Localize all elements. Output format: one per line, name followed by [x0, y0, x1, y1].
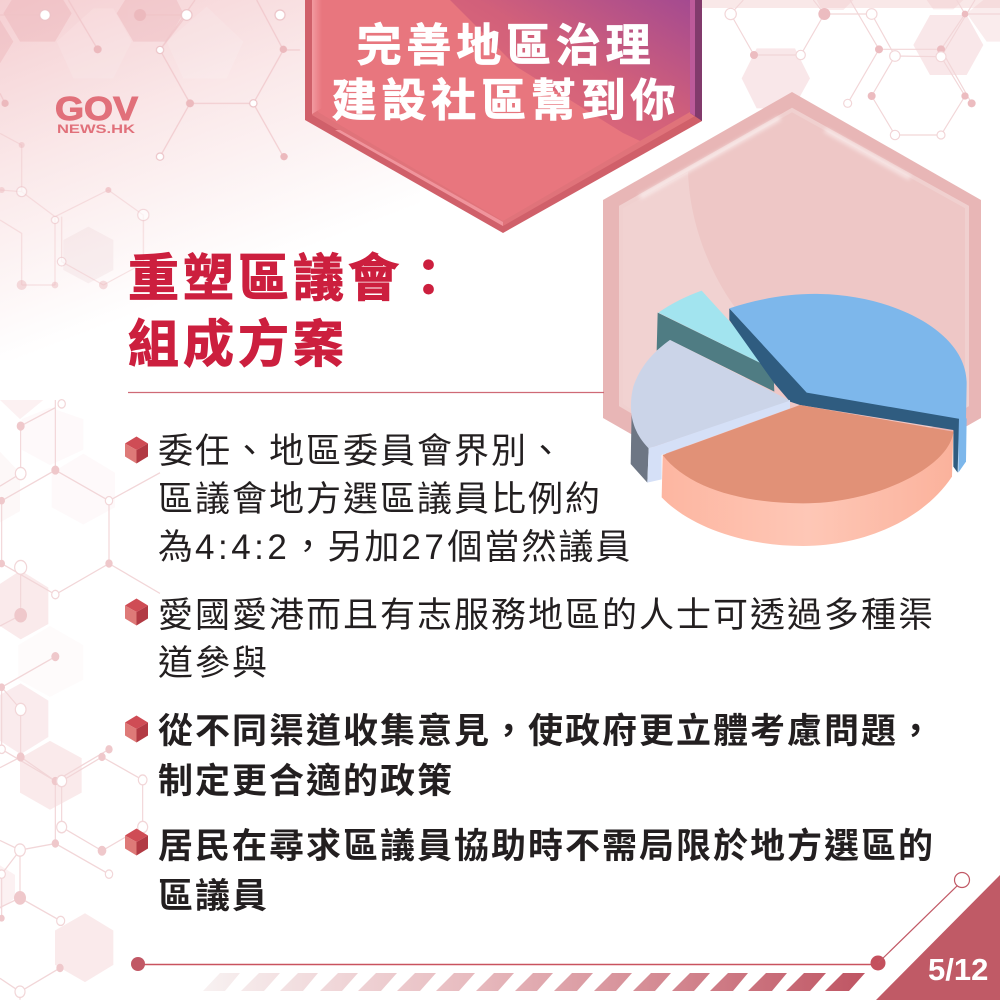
heading: 重塑區議會： — [128, 250, 458, 307]
bullet 1 text: 區議會地方選區議員比例約 — [158, 480, 602, 519]
icon: cube 1 — [125, 436, 148, 464]
bullet 1 text: 為4:4:2，另加27個當然議員 — [158, 528, 632, 567]
stripes — [203, 973, 865, 991]
bullet 2 text: 道參與 — [158, 644, 269, 683]
logo: GOV news.hk: NEWS.HK — [57, 122, 135, 136]
heading — [128, 250, 458, 373]
cyan slice — [657, 291, 774, 392]
icon: cube 4 — [125, 828, 148, 856]
bullet 1 text: 委任、地區委員會界別、 — [158, 432, 565, 471]
bullet 3 text — [158, 712, 935, 801]
grey-lavender slice — [631, 340, 790, 483]
bullet 4 text: 區議員 — [158, 877, 269, 916]
banner title — [332, 20, 680, 126]
icon: cube 3 — [125, 716, 148, 742]
bullet 4 text: 居民在尋求區議員協助時不需局限於地方選區的 — [158, 827, 935, 866]
banner title: 建設社區幫到你 — [332, 75, 680, 126]
banner title: 完善地區治理 — [357, 20, 655, 71]
bullet 4 text — [158, 827, 935, 916]
page number: 5/12 — [928, 952, 988, 987]
bullet 2 text — [158, 596, 935, 683]
blue slice — [729, 294, 967, 473]
salmon slice — [662, 405, 953, 546]
logo: GOV news.hk: GOV — [55, 90, 138, 127]
heading: 組成方案 — [128, 316, 348, 373]
bullet 3 text: 制定更合適的政策 — [158, 762, 454, 801]
icon: cube 2 — [125, 598, 148, 626]
bullet 3 text: 從不同渠道收集意見，使政府更立體考慮問題， — [158, 712, 935, 751]
bullet 1 text — [158, 432, 632, 567]
bullet 2 text: 愛國愛港而且有志服務地區的人士可透過多種渠 — [158, 596, 935, 635]
